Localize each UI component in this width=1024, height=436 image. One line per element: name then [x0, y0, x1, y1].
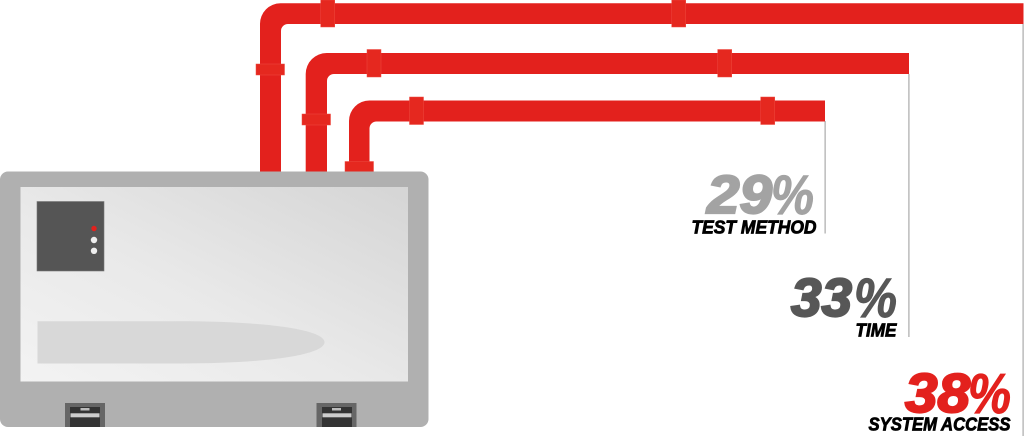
- stat: 33% time: [791, 266, 897, 340]
- port right: [316, 403, 356, 427]
- value digits: 33: [791, 268, 852, 328]
- pipe: system access: [256, 0, 1024, 172]
- value digits: 38: [905, 362, 970, 424]
- value percent sign: %: [968, 362, 1011, 426]
- device: control unit: [0, 172, 428, 427]
- pipe: time: [302, 50, 909, 172]
- stat: 38% system access: [868, 362, 1011, 434]
- pipe: test method: [345, 97, 825, 172]
- label: SYSTEM ACCESS: [868, 414, 1010, 434]
- port left: [65, 403, 105, 427]
- device body: [0, 172, 428, 427]
- panel highlight shape: [38, 321, 324, 364]
- value digits: 29: [706, 165, 772, 225]
- value percent sign: %: [771, 163, 814, 226]
- leader line: system access: [1022, 24, 1024, 436]
- front panel: [20, 187, 408, 382]
- stat: 29% test method: [692, 163, 816, 238]
- value percent sign: %: [854, 266, 897, 329]
- leader line: test method: [825, 121, 826, 234]
- leader line: time: [908, 74, 910, 337]
- label: TIME: [856, 320, 897, 340]
- display box with indicator lights: [37, 202, 104, 271]
- label: TEST METHOD: [692, 218, 816, 238]
